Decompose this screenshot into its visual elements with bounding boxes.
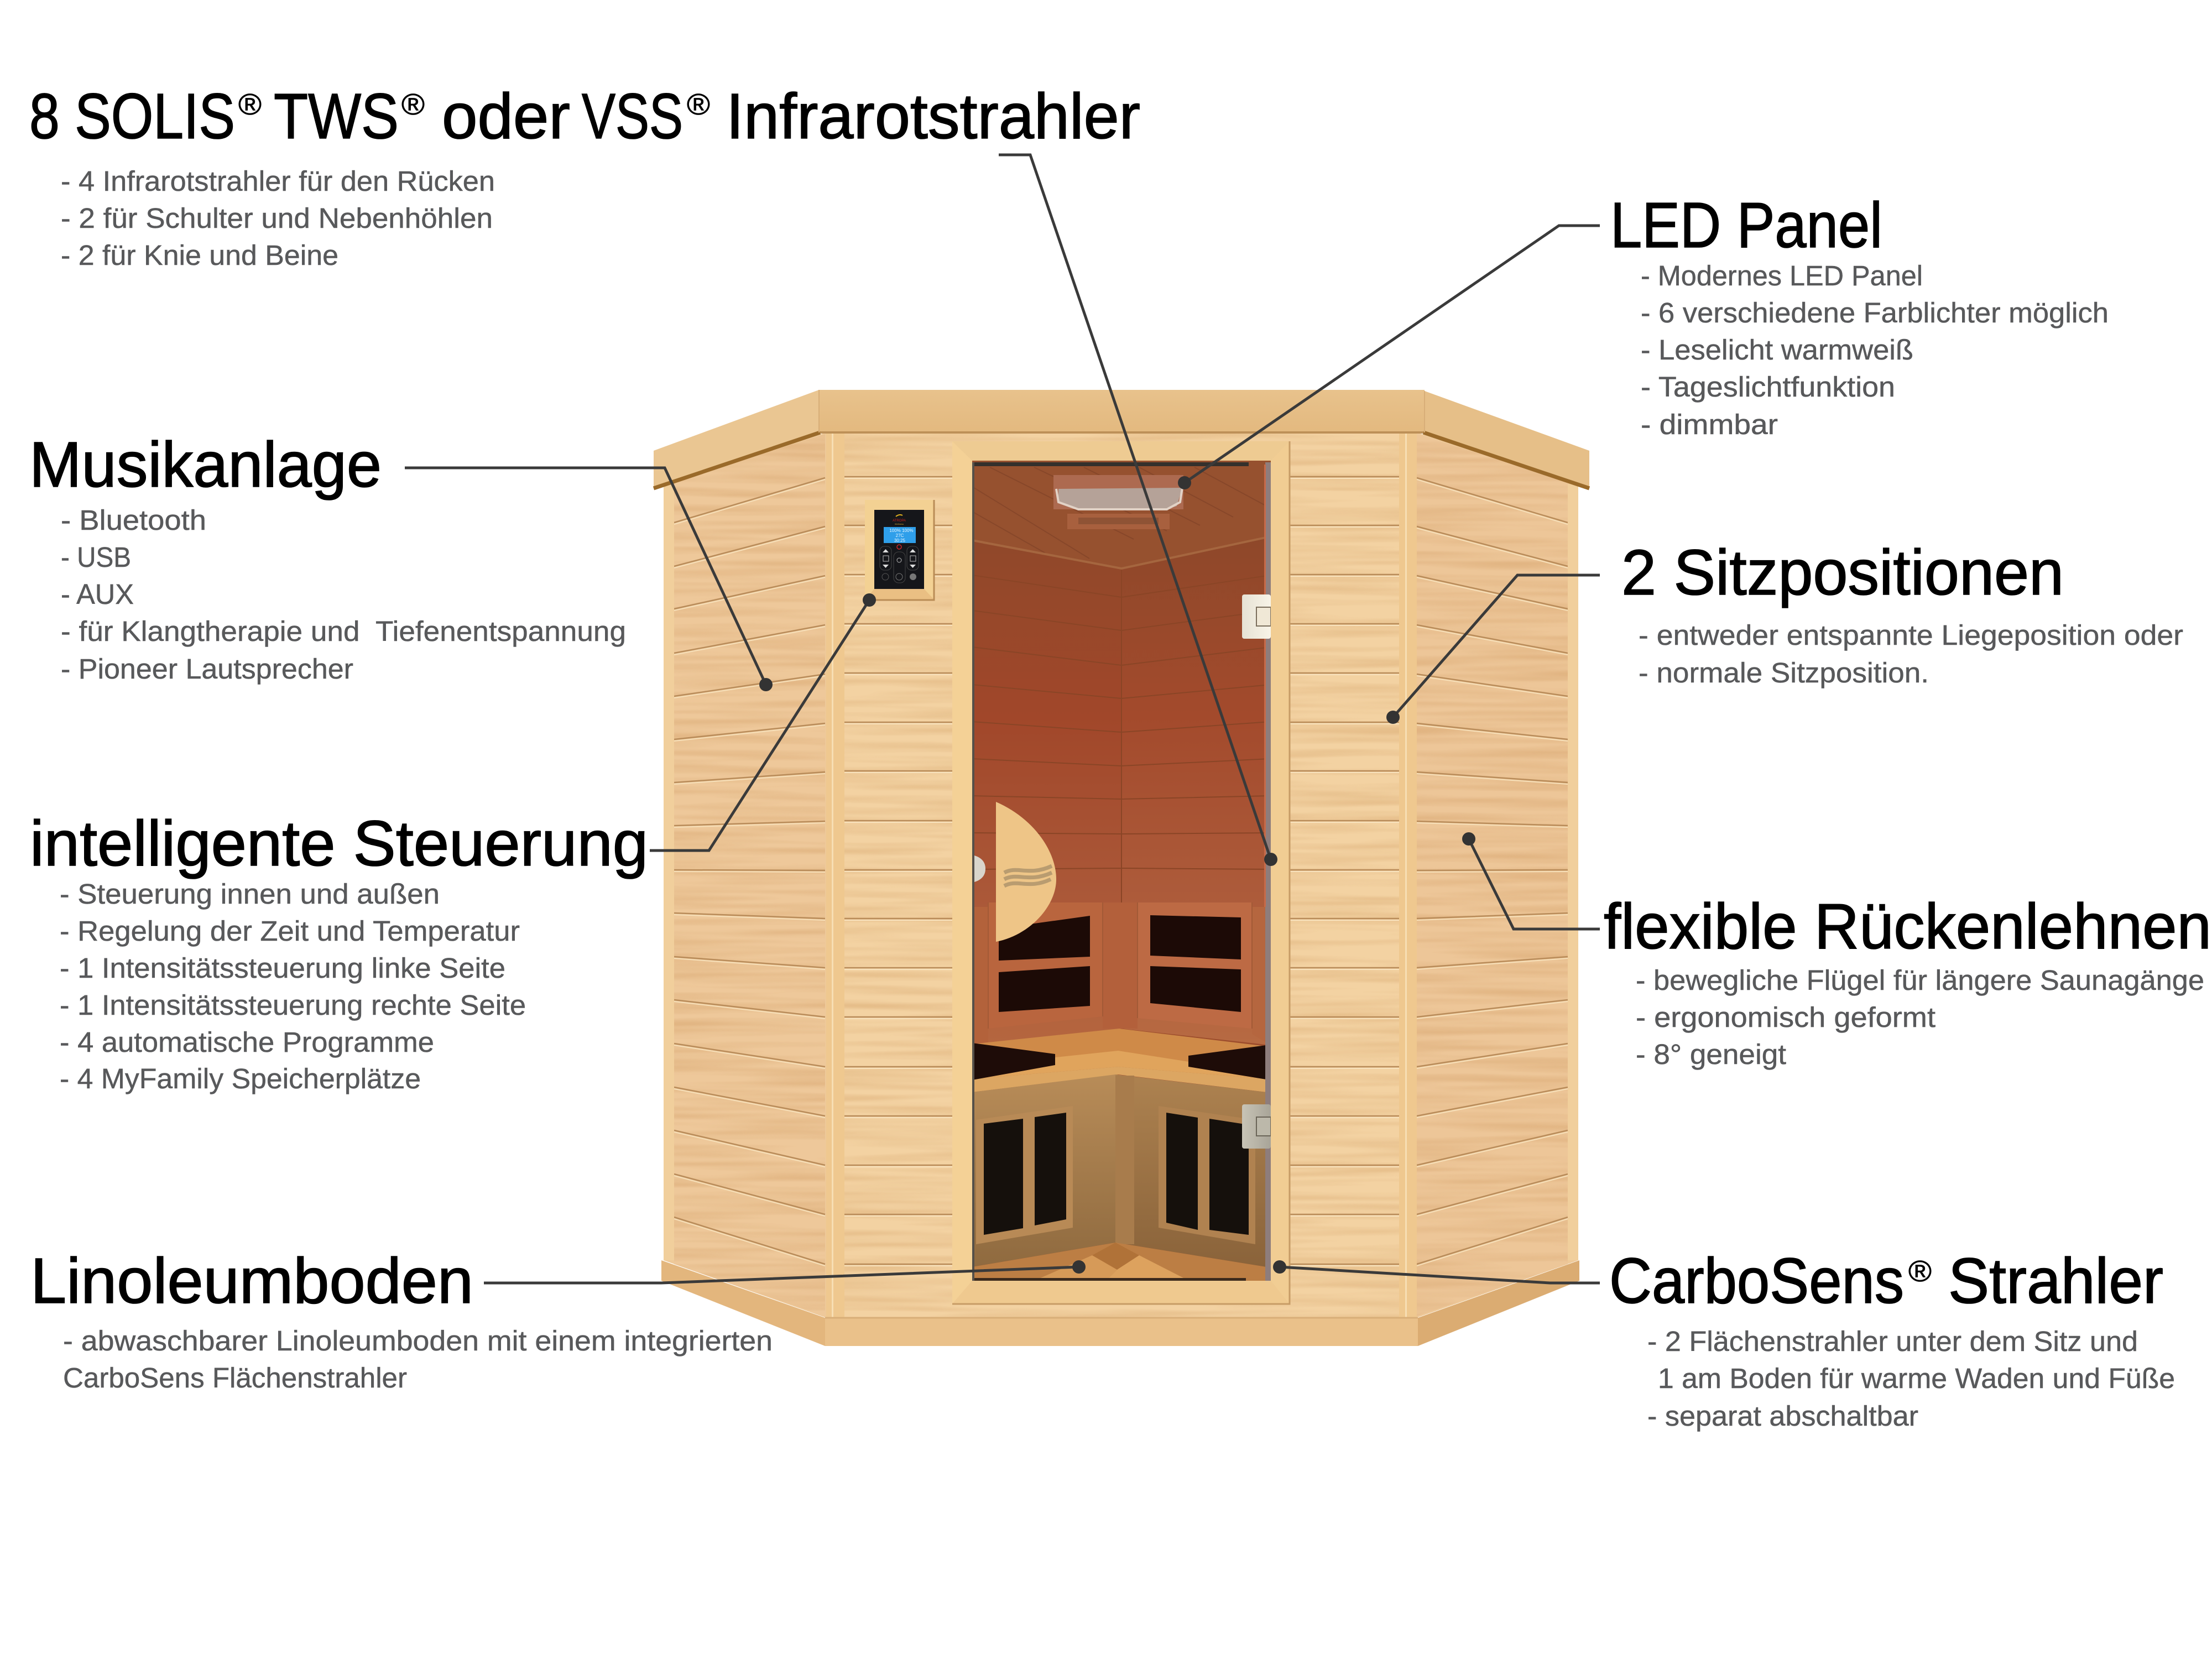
text block: music system: - USB — [61, 541, 131, 573]
text block: LED panel: - Leselicht warmweiß — [1641, 334, 1913, 366]
text block: infrared emitters: - 2 für Schulter und Nebenhöhlen — [61, 202, 493, 234]
text block: linoleum floor — [63, 1325, 773, 1394]
text block: music system: - AUX — [61, 578, 134, 610]
LED ceiling panel — [1053, 475, 1183, 529]
callout: backrest leader — [1462, 832, 1600, 929]
floor — [972, 1243, 1266, 1281]
carbon heaters upper — [999, 915, 1241, 1012]
callout: floor leader — [484, 1260, 1086, 1283]
text block: intelligent control: - 1 Intensitätssteuerung rechte Seite — [60, 989, 526, 1021]
left wall panel — [664, 432, 826, 1318]
control panel — [865, 500, 934, 600]
text block: linoleum floor: CarboSens Flächenstrahler — [63, 1362, 407, 1394]
text block: LED panel: - Modernes LED Panel — [1641, 260, 1923, 291]
right wall panel — [1417, 432, 1578, 1318]
control panel screen: 27C — [896, 533, 904, 538]
text block: seating positions: - entweder entspannte Liegeposition oder — [1639, 619, 2183, 651]
heading: linoleum floor: Linoleumboden — [30, 1245, 473, 1317]
sauna cabin illustration — [654, 390, 1589, 1346]
seat cushions — [972, 1043, 1266, 1080]
callout: seating leader — [1386, 575, 1600, 724]
text block: infrared emitters: - 4 Infrarotstrahler für den Rücken — [61, 165, 495, 197]
text block: intelligent control: - Steuerung innen und außen — [60, 878, 440, 910]
text block: intelligent control: - Regelung der Zeit und Temperatur — [60, 915, 520, 947]
text block: flexible backrests: - bewegliche Flügel für längere Saunagänge — [1636, 964, 2204, 996]
bench — [972, 1029, 1266, 1092]
carbon heaters lower — [984, 1113, 1249, 1235]
interior ceiling — [972, 461, 1271, 568]
text block: intelligent control: - 1 Intensitätssteuerung linke Seite — [60, 952, 505, 984]
text block: infrared emitters: - 2 für Knie und Beine — [61, 239, 338, 271]
heading: carbon heaters: Strahler — [1948, 1245, 2163, 1317]
heading: carbon heaters: ® — [1908, 1255, 1932, 1288]
text block: infrared emitters — [61, 165, 495, 271]
text block: music system — [61, 504, 626, 685]
control panel screen: 30:25 — [894, 538, 906, 543]
heading: infrared emitters: TWS — [274, 80, 399, 152]
heading: infrared emitters: 8 SOLIS — [29, 80, 235, 152]
door handle — [972, 855, 985, 883]
text block: music system: - für Klangtherapie und Tiefenentspannung — [61, 615, 626, 647]
callout: carbon heater leader — [1273, 1260, 1600, 1283]
roof cornice — [654, 390, 1589, 488]
text block: LED panel — [1641, 260, 2109, 440]
heading: infrared emitters: ® — [238, 88, 262, 121]
text block: music system: - Pioneer Lautsprecher — [61, 653, 353, 685]
control panel frame — [865, 500, 934, 600]
text block: flexible backrests — [1636, 964, 2204, 1070]
text block: seating positions: - normale Sitzposition. — [1639, 657, 1929, 688]
text block: carbon heaters: - 2 Flächenstrahler unter dem Sitz und — [1647, 1326, 2138, 1357]
heading: carbon heaters: CarboSens — [1609, 1245, 1904, 1317]
front wall panel — [844, 432, 1399, 1318]
door frame — [952, 441, 1290, 1304]
text block: intelligent control: - 4 MyFamily Speicherplätze — [60, 1063, 421, 1094]
text block: music system: - Bluetooth — [61, 504, 206, 536]
heading: infrared emitters: Infrarotstrahler — [726, 80, 1140, 152]
text block: linoleum floor: - abwaschbarer Linoleumboden mit einem integrierten — [63, 1325, 773, 1357]
text block: flexible backrests: - ergonomisch geformt — [1636, 1001, 1936, 1033]
text block: seating positions — [1639, 619, 2183, 688]
callout: music system leader — [405, 468, 773, 691]
control panel screen: Wellness — [895, 523, 904, 525]
text block: carbon heaters: 1 am Boden für warme Waden und Füße — [1658, 1363, 2175, 1394]
interior back walls — [972, 461, 1271, 1281]
control panel screen: 100% 100% — [889, 528, 914, 533]
heading: music system: Musikanlage — [29, 429, 382, 500]
callout: infrared emitters leader — [999, 155, 1277, 866]
corner posts — [826, 432, 1417, 1318]
text block: flexible backrests: - 8° geneigt — [1636, 1039, 1786, 1070]
text block: LED panel: - Tageslichtfunktion — [1641, 371, 1895, 403]
glass edge and dark seals — [972, 462, 1271, 1282]
text block: LED panel: - dimmbar — [1641, 409, 1778, 440]
control panel screen — [874, 510, 924, 589]
heading: intelligent control: intelligente Steuerung — [30, 807, 648, 879]
lower door hinge — [1242, 1104, 1271, 1149]
plinth base — [661, 1260, 1579, 1346]
heading: LED panel: LED Panel — [1610, 189, 1882, 261]
backrest — [996, 802, 1056, 942]
lower cabinet — [972, 1074, 1266, 1267]
callout: LED panel leader — [1178, 226, 1600, 489]
upper door hinge — [1242, 594, 1271, 639]
heading: infrared emitters: oder — [442, 80, 570, 152]
heading: infrared emitters: VSS — [582, 80, 683, 152]
callout: control leader — [650, 593, 876, 851]
text block: carbon heaters — [1647, 1326, 2175, 1432]
heading: seating positions: 2 Sitzpositionen — [1621, 536, 2064, 608]
text block: intelligent control — [60, 878, 526, 1094]
text block: carbon heaters: - separat abschaltbar — [1647, 1400, 1918, 1432]
heading: infrared emitters: ® — [401, 88, 425, 121]
sauna interior — [972, 461, 1271, 1282]
text block: intelligent control: - 4 automatische Programme — [60, 1026, 434, 1058]
window frames — [972, 902, 1271, 1045]
text block: LED panel: - 6 verschiedene Farblichter möglich — [1641, 297, 2109, 328]
control panel screen: ATROPA — [893, 519, 906, 523]
heading: infrared emitters: ® — [687, 88, 710, 121]
